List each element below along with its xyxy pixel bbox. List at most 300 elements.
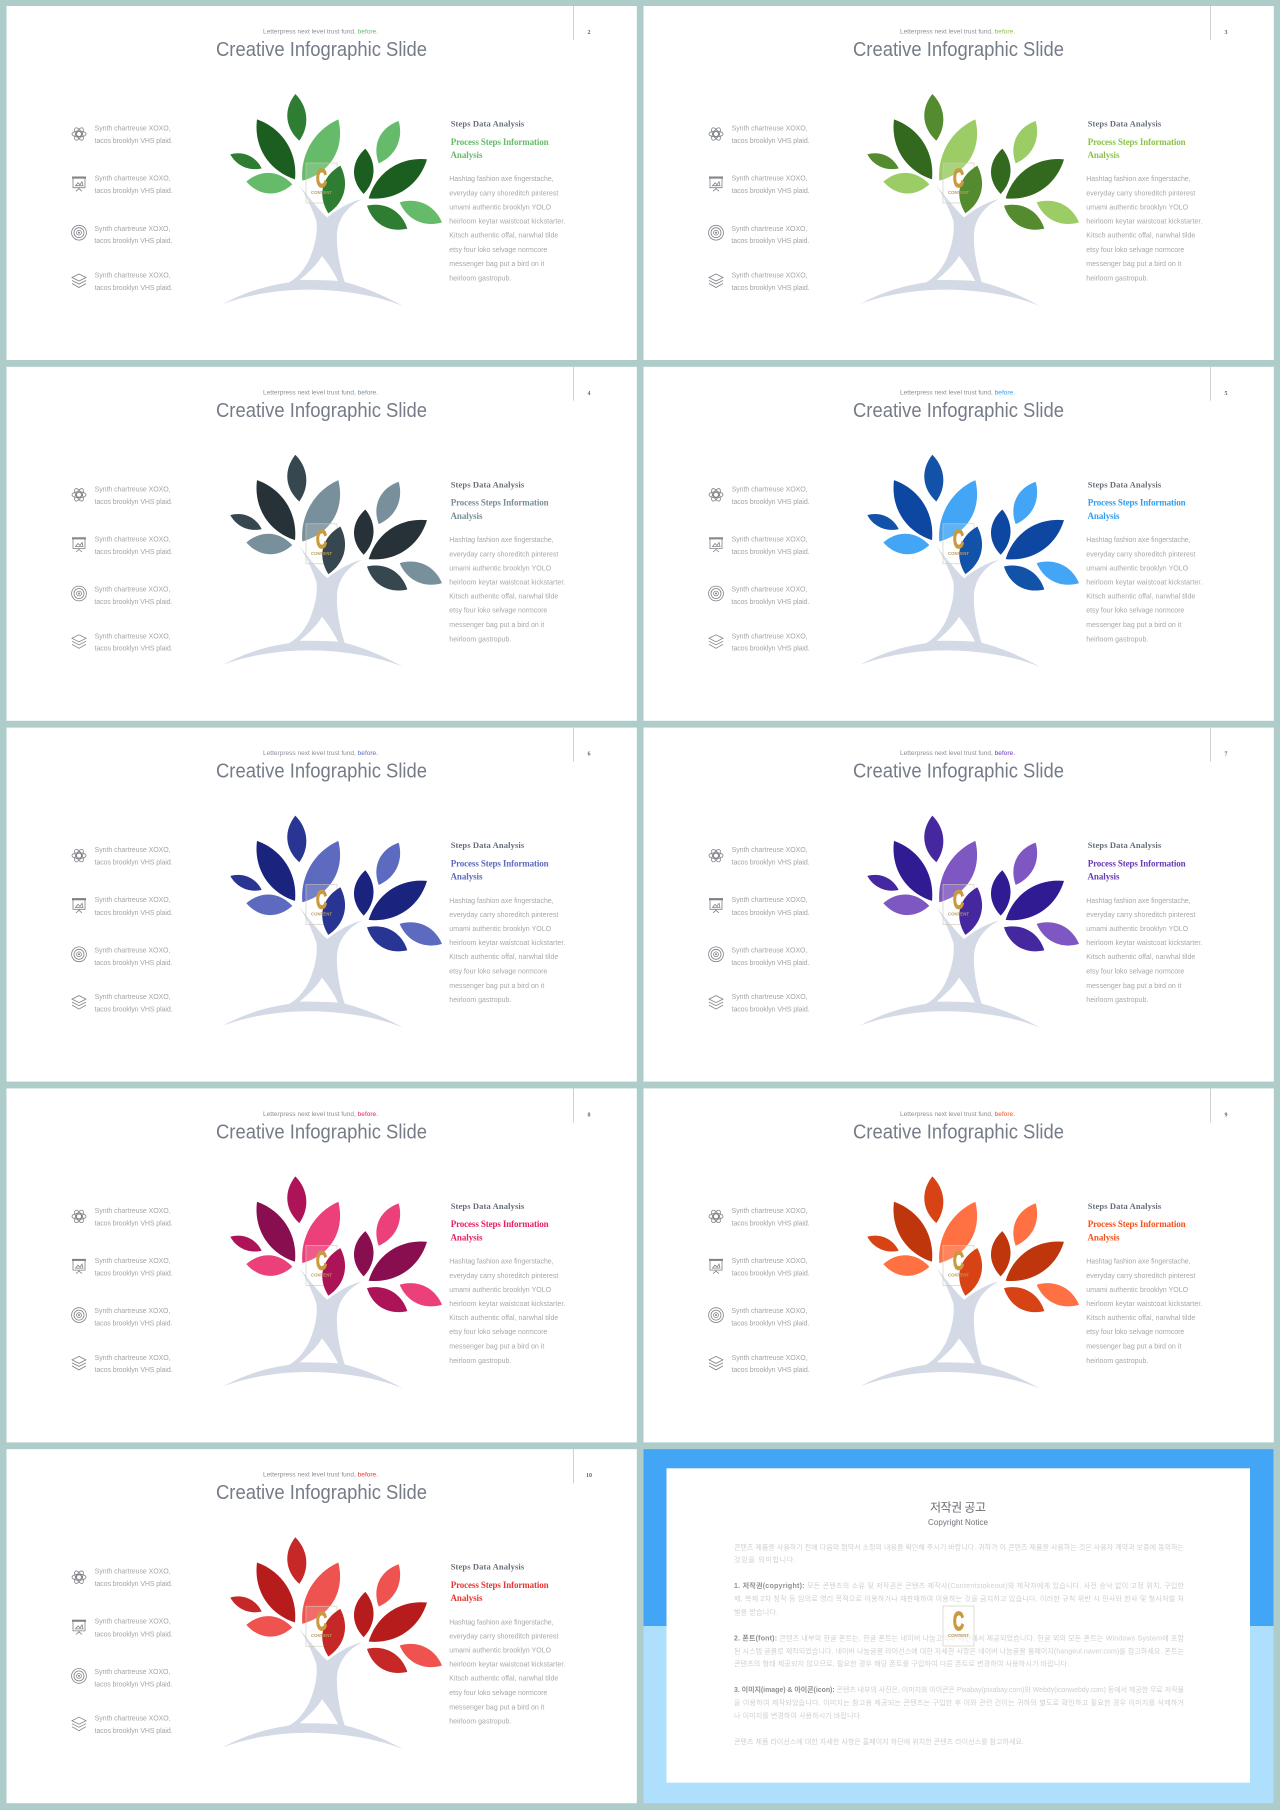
text block: messenger bag put a bird on it bbox=[449, 983, 544, 990]
text block: Hashtag fashion axe fingerstache, bbox=[1086, 176, 1191, 183]
copyright body text: 1. 저작권(copyright): 모든 콘텐츠의 소유 및 저작권은 콘텐츠 제작사(Contentstokeout)와 제작자에게 있습니다. 사전 승낙 없이 고정 위치, 구입한 bbox=[734, 1581, 1185, 1590]
copyright body text: 을 이용하여 제작되었습니다. 이미지는 참고용 제공되는 콘텐츠는 구입한 후 이와 관련 건이는 귀하의 별도로 확인하고 필요한 경우 이미지를 삭제하거 bbox=[734, 1698, 1184, 1707]
feature: layers icon and text: Synth chartreuse XOXO, bbox=[732, 272, 808, 280]
title: Creative Infographic Slide bbox=[216, 39, 427, 61]
text block: Analysis bbox=[1088, 872, 1120, 882]
subtitle: Letterpress next level trust fund, before. bbox=[263, 28, 378, 36]
text block: everyday carry shoreditch pinterest bbox=[449, 190, 558, 198]
feature: presentation icon and text bbox=[72, 1258, 173, 1278]
text block: everyday carry shoreditch pinterest bbox=[449, 1634, 558, 1641]
subtitle: Letterpress next level trust fund, before. bbox=[263, 1472, 378, 1479]
text block: etsy four loko selvage normcore bbox=[449, 247, 547, 254]
feature: layers icon and text: Synth chartreuse XOXO, bbox=[732, 994, 808, 1001]
copyright subheading: Copyright Notice bbox=[928, 1518, 989, 1527]
text block: Kitsch authentic offal, narwhal tilde bbox=[449, 232, 558, 240]
feature: layers icon and text: Synth chartreuse XOXO, bbox=[95, 1716, 171, 1723]
text block: heirloom gastropub. bbox=[1086, 276, 1148, 282]
text block bbox=[449, 479, 565, 643]
feature: target icon and text: tacos brooklyn VHS plaid. bbox=[94, 238, 172, 245]
text block: Kitsch authentic offal, narwhal tilde bbox=[449, 593, 558, 600]
feature: layers icon and text: tacos brooklyn VHS plaid. bbox=[732, 1006, 810, 1013]
text block: everyday carry shoreditch pinterest bbox=[449, 1273, 558, 1280]
text block: etsy four loko selvage normcore bbox=[449, 968, 547, 975]
text block bbox=[449, 118, 565, 282]
panel: copyright notice bbox=[644, 1449, 1274, 1803]
text block: messenger bag put a bird on it bbox=[449, 261, 544, 268]
feature: presentation icon and text: tacos brooklyn VHS plaid. bbox=[95, 1271, 173, 1278]
text block: Steps Data Analysis bbox=[451, 1201, 525, 1211]
text block: messenger bag put a bird on it bbox=[1086, 261, 1181, 268]
title: Creative Infographic Slide bbox=[853, 400, 1064, 422]
feature: presentation icon and text bbox=[709, 1258, 810, 1278]
text block: messenger bag put a bird on it bbox=[449, 622, 544, 629]
feature: target icon and text: Synth chartreuse XOXO, bbox=[731, 587, 807, 594]
text block: etsy four loko selvage normcore bbox=[449, 1329, 547, 1336]
panel: slide 7 purple tree bbox=[644, 728, 1274, 1082]
feature: layers icon and text: tacos brooklyn VHS plaid. bbox=[95, 646, 173, 653]
text block: etsy four loko selvage normcore bbox=[1086, 608, 1184, 615]
page number: 3 bbox=[1224, 30, 1228, 36]
feature: target icon and text: tacos brooklyn VHS plaid. bbox=[94, 599, 172, 606]
text block: everyday carry shoreditch pinterest bbox=[1086, 551, 1195, 558]
page number: 4 bbox=[588, 391, 590, 397]
tree illustration: CONTENT bbox=[311, 1272, 332, 1277]
text block: Steps Data Analysis bbox=[451, 840, 525, 850]
feature: target icon and text: tacos brooklyn VHS plaid. bbox=[731, 238, 809, 245]
tree illustration bbox=[860, 816, 1079, 1028]
feature: target icon and text: Synth chartreuse XOXO, bbox=[94, 1308, 170, 1315]
page number: 6 bbox=[588, 752, 590, 758]
panel: slide 2 green tree bbox=[6, 6, 637, 360]
text block: Steps Data Analysis bbox=[451, 479, 525, 489]
feature: presentation icon and text: tacos brooklyn VHS plaid. bbox=[732, 1271, 810, 1278]
text block: Steps Data Analysis bbox=[1088, 479, 1162, 489]
text block: Hashtag fashion axe fingerstache, bbox=[449, 537, 554, 544]
feature: target icon and text bbox=[709, 225, 809, 245]
feature: presentation icon and text bbox=[709, 536, 810, 556]
feature: presentation icon and text bbox=[709, 897, 810, 917]
tree illustration bbox=[223, 94, 442, 306]
text block: Analysis bbox=[450, 1593, 483, 1603]
feature: target icon and text: tacos brooklyn VHS plaid. bbox=[94, 960, 172, 967]
text block bbox=[1086, 1201, 1202, 1365]
feature list bbox=[709, 126, 810, 292]
feature: atom icon and text: Synth chartreuse XOXO, bbox=[95, 126, 171, 132]
feature: atom icon and text bbox=[72, 1208, 173, 1227]
feature: atom icon and text bbox=[709, 847, 810, 867]
feature: target icon and text bbox=[72, 1308, 172, 1328]
feature: target icon and text bbox=[709, 1308, 809, 1328]
text block bbox=[449, 840, 565, 1004]
feature: atom icon and text: tacos brooklyn VHS plaid. bbox=[732, 1220, 810, 1227]
feature: target icon and text bbox=[72, 947, 172, 967]
text block: heirloom gastropub. bbox=[449, 1358, 511, 1365]
text block: messenger bag put a bird on it bbox=[1086, 983, 1181, 990]
text block: umami authentic brooklyn YOLO bbox=[1086, 926, 1189, 933]
feature: atom icon and text bbox=[709, 1208, 810, 1227]
feature: layers icon and text: Synth chartreuse XOXO, bbox=[95, 1355, 171, 1362]
tree illustration: C bbox=[316, 1245, 327, 1275]
feature: layers icon and text: Synth chartreuse XOXO, bbox=[95, 272, 171, 280]
copyright body text: 콘텐츠 제품 라이선스에 대한 자세한 사항은 홈페이지 하단에 위치한 콘텐츠 라이선스를 참고하세요. bbox=[734, 1737, 1024, 1746]
feature: layers icon and text bbox=[72, 1716, 173, 1735]
text block: etsy four loko selvage normcore bbox=[1086, 968, 1184, 975]
feature: layers icon and text bbox=[709, 994, 810, 1013]
text block: heirloom keytar waistcoat kickstarter. bbox=[449, 940, 565, 947]
text block: heirloom keytar waistcoat kickstarter. bbox=[449, 1301, 565, 1308]
feature: atom icon and text: tacos brooklyn VHS plaid. bbox=[95, 1581, 173, 1588]
feature: layers icon and text bbox=[709, 272, 810, 292]
text block: Steps Data Analysis bbox=[451, 1562, 525, 1572]
feature: layers icon and text: tacos brooklyn VHS plaid. bbox=[732, 285, 810, 292]
text block: Analysis bbox=[450, 1232, 483, 1242]
copyright body text: 된 시스템 글꼴로 제작되었습니다. 네이버 나눔글꼴 라이선스에 대한 자세한 사항은 네이버 나눔글꼴 홈페이지(hangeul.naver.com)를 참고하세요. 폰트는 bbox=[734, 1646, 1185, 1656]
text block: heirloom gastropub. bbox=[449, 1719, 511, 1726]
tree illustration bbox=[223, 1537, 442, 1749]
feature: presentation icon and text bbox=[72, 176, 173, 195]
tree illustration: C bbox=[316, 524, 327, 554]
watermark logo: C bbox=[953, 1606, 964, 1636]
text block: etsy four loko selvage normcore bbox=[449, 1690, 547, 1697]
tree illustration bbox=[860, 1176, 1079, 1388]
text block bbox=[1086, 479, 1202, 643]
tree illustration bbox=[860, 94, 1079, 306]
title: Creative Infographic Slide bbox=[216, 761, 427, 783]
feature: presentation icon and text: Synth chartreuse XOXO, bbox=[95, 536, 171, 543]
feature: layers icon and text: Synth chartreuse XOXO, bbox=[95, 994, 171, 1001]
page number: 10 bbox=[586, 1473, 592, 1479]
feature: atom icon and text bbox=[709, 126, 810, 145]
text block: heirloom gastropub. bbox=[1086, 636, 1148, 643]
text block bbox=[449, 1562, 565, 1726]
watermark logo bbox=[943, 1606, 974, 1646]
panel: slide 6 indigo tree bbox=[6, 728, 637, 1082]
feature: atom icon and text bbox=[72, 1569, 173, 1588]
feature: atom icon and text: Synth chartreuse XOXO, bbox=[95, 1569, 171, 1576]
feature: layers icon and text bbox=[72, 633, 173, 653]
feature: presentation icon and text bbox=[72, 536, 173, 556]
feature: layers icon and text bbox=[72, 1355, 173, 1374]
subtitle: Letterpress next level trust fund, before. bbox=[900, 750, 1015, 757]
copyright body text: 3. 이미지(image) & 아이콘(icon): 콘텐츠 내부의 사진은, 이미지와 아이콘은 Pixabay(pixabay.com)와 Webdy(iconwebdy.com) 등에서 제공한 무료 저작물 bbox=[734, 1685, 1185, 1694]
feature: presentation icon and text: tacos brooklyn VHS plaid. bbox=[95, 549, 173, 556]
text block: Kitsch authentic offal, narwhal tilde bbox=[449, 1676, 558, 1683]
feature: layers icon and text: tacos brooklyn VHS plaid. bbox=[732, 646, 810, 653]
feature: atom icon and text: tacos brooklyn VHS plaid. bbox=[732, 860, 810, 867]
feature: presentation icon and text: Synth chartreuse XOXO, bbox=[732, 1258, 808, 1265]
panel: slide 4 slate tree bbox=[6, 367, 637, 721]
feature: atom icon and text: Synth chartreuse XOXO, bbox=[95, 847, 171, 854]
feature: layers icon and text: tacos brooklyn VHS plaid. bbox=[95, 1006, 173, 1013]
text block: Steps Data Analysis bbox=[1088, 1201, 1162, 1211]
feature: target icon and text bbox=[709, 947, 809, 967]
copyright body text: 나 이미지를 변경하여 사용하시기 바랍니다. bbox=[734, 1711, 862, 1720]
title: Creative Infographic Slide bbox=[853, 39, 1064, 61]
feature: atom icon and text: tacos brooklyn VHS plaid. bbox=[95, 1220, 173, 1227]
text block: Process Steps Information bbox=[451, 498, 549, 508]
text block: heirloom keytar waistcoat kickstarter. bbox=[449, 218, 565, 226]
feature: layers icon and text: tacos brooklyn VHS plaid. bbox=[95, 285, 173, 292]
feature: presentation icon and text: Synth chartreuse XOXO, bbox=[732, 536, 808, 543]
text block: Kitsch authentic offal, narwhal tilde bbox=[1086, 954, 1195, 961]
text block: Process Steps Information bbox=[1088, 1219, 1186, 1229]
copyright body text bbox=[734, 1542, 1185, 1746]
tree illustration: C bbox=[953, 524, 964, 554]
title: Creative Infographic Slide bbox=[216, 1482, 427, 1504]
title: Creative Infographic Slide bbox=[216, 1121, 427, 1143]
feature: presentation icon and text: Synth chartreuse XOXO, bbox=[95, 1619, 171, 1626]
text block: Analysis bbox=[1088, 1232, 1120, 1242]
panel: slide 9 orange tree bbox=[644, 1088, 1274, 1442]
text block: umami authentic brooklyn YOLO bbox=[449, 1287, 552, 1294]
feature: atom icon and text bbox=[72, 486, 173, 506]
page number: 9 bbox=[1224, 1112, 1228, 1118]
text block: everyday carry shoreditch pinterest bbox=[1086, 1273, 1195, 1280]
feature: atom icon and text bbox=[709, 486, 810, 506]
feature: atom icon and text: tacos brooklyn VHS plaid. bbox=[95, 138, 173, 145]
copyright body text: 콘텐츠 제품을 사용하기 전에 다음의 협약서 소정의 내용을 확인해 주시기 바랍니다. 귀하가 이 콘텐츠 제품을 사용하는 것은 사용자 계약과 보증에 동의하는 bbox=[734, 1542, 1185, 1552]
text block: etsy four loko selvage normcore bbox=[1086, 247, 1184, 254]
text block: heirloom gastropub. bbox=[449, 997, 511, 1004]
text block: Process Steps Information bbox=[451, 1219, 549, 1229]
feature: atom icon and text: Synth chartreuse XOXO, bbox=[95, 1208, 171, 1215]
text block: Hashtag fashion axe fingerstache, bbox=[1086, 898, 1191, 905]
text block bbox=[449, 1201, 565, 1365]
feature list bbox=[72, 1208, 173, 1374]
feature: target icon and text bbox=[72, 586, 172, 606]
feature: layers icon and text bbox=[72, 272, 173, 292]
feature: target icon and text: Synth chartreuse XOXO, bbox=[731, 1308, 807, 1315]
text block: Steps Data Analysis bbox=[1088, 118, 1162, 128]
copyright body text: 벌을 받습니다. bbox=[734, 1608, 778, 1616]
subtitle: Letterpress next level trust fund, before. bbox=[900, 389, 1015, 396]
text block: Analysis bbox=[450, 150, 483, 160]
text block: umami authentic brooklyn YOLO bbox=[449, 204, 552, 212]
feature: atom icon and text bbox=[72, 126, 173, 145]
text block: Analysis bbox=[450, 511, 483, 521]
feature list bbox=[72, 486, 173, 653]
subtitle: Letterpress next level trust fund, before. bbox=[263, 750, 378, 757]
feature: atom icon and text: Synth chartreuse XOXO, bbox=[95, 486, 171, 493]
text block: everyday carry shoreditch pinterest bbox=[1086, 912, 1195, 919]
text block: Process Steps Information bbox=[451, 858, 549, 868]
text block: etsy four loko selvage normcore bbox=[449, 608, 547, 615]
tree illustration: CONTENT bbox=[948, 190, 969, 195]
tree illustration: C bbox=[953, 1245, 964, 1275]
text block: Hashtag fashion axe fingerstache, bbox=[449, 1619, 554, 1626]
feature: presentation icon and text: Synth chartreuse XOXO, bbox=[95, 897, 171, 904]
watermark logo: CONTENT bbox=[948, 1633, 969, 1638]
text block: umami authentic brooklyn YOLO bbox=[449, 1648, 552, 1655]
text block: heirloom keytar waistcoat kickstarter. bbox=[449, 1662, 565, 1669]
panel: slide 8 pink tree bbox=[6, 1088, 637, 1442]
text block: Process Steps Information bbox=[451, 1580, 549, 1590]
text block: everyday carry shoreditch pinterest bbox=[1086, 190, 1195, 198]
feature: presentation icon and text bbox=[72, 1619, 173, 1638]
feature: layers icon and text bbox=[709, 1355, 810, 1374]
title: Creative Infographic Slide bbox=[853, 1121, 1064, 1143]
feature: target icon and text bbox=[72, 225, 172, 245]
feature: atom icon and text: tacos brooklyn VHS plaid. bbox=[95, 499, 173, 506]
feature: target icon and text: Synth chartreuse XOXO, bbox=[94, 947, 170, 954]
feature: presentation icon and text: tacos brooklyn VHS plaid. bbox=[732, 910, 810, 917]
text block: umami authentic brooklyn YOLO bbox=[1086, 204, 1189, 212]
panel: slide 10 red tree bbox=[6, 1449, 637, 1803]
page number: 8 bbox=[588, 1112, 590, 1118]
text block: Process Steps Information bbox=[451, 137, 549, 147]
text block: messenger bag put a bird on it bbox=[449, 1704, 544, 1711]
tree illustration bbox=[223, 455, 442, 667]
text block: Hashtag fashion axe fingerstache, bbox=[1086, 537, 1191, 544]
copyright body text: 것임을 의미합니다. bbox=[734, 1555, 796, 1564]
text block: umami authentic brooklyn YOLO bbox=[1086, 1287, 1189, 1294]
text block: Hashtag fashion axe fingerstache, bbox=[449, 898, 554, 905]
copyright body text: 제, 복제 2차 창작 등 임의로 영리 목적으로 이용하거나 재판매하여 이용하는 것을 금지하고 있습니다. 이러한 규칙 위반 시 민사와 한사 및 형사처벌 처 bbox=[734, 1594, 1184, 1603]
tree illustration: C bbox=[316, 1606, 327, 1636]
feature: target icon and text: tacos brooklyn VHS plaid. bbox=[731, 1321, 809, 1328]
text block: Kitsch authentic offal, narwhal tilde bbox=[449, 954, 558, 961]
subtitle: Letterpress next level trust fund, before. bbox=[900, 1111, 1015, 1118]
feature: presentation icon and text bbox=[709, 176, 810, 195]
feature: presentation icon and text: Synth chartreuse XOXO, bbox=[95, 1258, 171, 1265]
feature: layers icon and text: tacos brooklyn VHS plaid. bbox=[95, 1367, 173, 1374]
text block: umami authentic brooklyn YOLO bbox=[449, 565, 552, 572]
text block: Analysis bbox=[1088, 511, 1120, 521]
feature: presentation icon and text: tacos brooklyn VHS plaid. bbox=[732, 188, 810, 195]
text block: Kitsch authentic offal, narwhal tilde bbox=[1086, 593, 1195, 600]
feature: target icon and text bbox=[72, 1668, 172, 1688]
feature: target icon and text: tacos brooklyn VHS plaid. bbox=[94, 1321, 172, 1328]
text block: Hashtag fashion axe fingerstache, bbox=[449, 176, 554, 183]
tree illustration bbox=[860, 455, 1079, 667]
feature list bbox=[709, 486, 810, 653]
text block: heirloom gastropub. bbox=[449, 636, 511, 643]
text block: heirloom keytar waistcoat kickstarter. bbox=[1086, 1301, 1202, 1308]
tree illustration bbox=[223, 816, 442, 1028]
text block: heirloom gastropub. bbox=[449, 276, 511, 282]
text block: Kitsch authentic offal, narwhal tilde bbox=[1086, 1315, 1195, 1322]
feature: atom icon and text: Synth chartreuse XOXO, bbox=[732, 847, 808, 854]
text block: Steps Data Analysis bbox=[451, 118, 525, 128]
tree illustration: CONTENT bbox=[948, 1272, 969, 1277]
feature: target icon and text: Synth chartreuse XOXO, bbox=[731, 226, 807, 233]
feature: atom icon and text: Synth chartreuse XOXO, bbox=[732, 486, 808, 493]
text block: Process Steps Information bbox=[1088, 137, 1186, 147]
text block: messenger bag put a bird on it bbox=[449, 1344, 544, 1351]
feature: target icon and text: tacos brooklyn VHS plaid. bbox=[731, 960, 809, 967]
tree illustration: CONTENT bbox=[948, 912, 969, 917]
text block: Process Steps Information bbox=[1088, 858, 1186, 868]
text block: Steps Data Analysis bbox=[1088, 840, 1162, 850]
page number: 5 bbox=[1224, 391, 1228, 397]
feature: layers icon and text: tacos brooklyn VHS plaid. bbox=[95, 1728, 173, 1735]
text block: Process Steps Information bbox=[1088, 498, 1186, 508]
tree illustration: CONTENT bbox=[311, 190, 332, 195]
text block: heirloom keytar waistcoat kickstarter. bbox=[1086, 218, 1202, 226]
panel: slide 5 blue tree bbox=[644, 367, 1274, 721]
text block: umami authentic brooklyn YOLO bbox=[1086, 565, 1189, 572]
text block: Hashtag fashion axe fingerstache, bbox=[449, 1259, 554, 1266]
feature: layers icon and text: Synth chartreuse XOXO, bbox=[732, 1355, 808, 1362]
text block: heirloom gastropub. bbox=[1086, 997, 1148, 1004]
feature: layers icon and text: Synth chartreuse XOXO, bbox=[95, 633, 171, 640]
feature: presentation icon and text: tacos brooklyn VHS plaid. bbox=[732, 549, 810, 556]
feature: layers icon and text: tacos brooklyn VHS plaid. bbox=[732, 1367, 810, 1374]
tree illustration: C bbox=[953, 885, 964, 915]
feature: presentation icon and text: Synth chartreuse XOXO, bbox=[732, 897, 808, 904]
feature: target icon and text: Synth chartreuse XOXO, bbox=[94, 587, 170, 594]
title: Creative Infographic Slide bbox=[216, 400, 427, 422]
tree illustration: C bbox=[953, 163, 964, 193]
text block: Hashtag fashion axe fingerstache, bbox=[1086, 1259, 1191, 1266]
feature: target icon and text: Synth chartreuse XOXO, bbox=[94, 226, 170, 233]
copyright body text: 콘텐츠의 형태 제공되지 않으므로, 필요한 경우 해당 폰트를 구입하여 다른 폰트로 변경하여 사용하시기 바랍니다. bbox=[734, 1659, 1069, 1668]
feature: target icon and text: Synth chartreuse XOXO, bbox=[94, 1669, 170, 1676]
page number: 7 bbox=[1224, 752, 1228, 758]
tree illustration: CONTENT bbox=[311, 1633, 332, 1638]
text block: Kitsch authentic offal, narwhal tilde bbox=[1086, 232, 1195, 240]
page number: 2 bbox=[588, 30, 590, 36]
feature: target icon and text bbox=[709, 586, 809, 606]
text block: Analysis bbox=[450, 872, 483, 882]
copyright body text: 2. 폰트(font): 콘텐츠 내부의 한글 폰트는, 한글 폰트는 네이버 나눔고딕과 체언에서 제공되었습니다. 한글 외의 모든 폰트는 Windows System에 포함 bbox=[734, 1634, 1185, 1642]
feature: atom icon and text: Synth chartreuse XOXO, bbox=[732, 1208, 808, 1215]
feature list bbox=[72, 1569, 173, 1735]
feature: atom icon and text: tacos brooklyn VHS plaid. bbox=[95, 860, 173, 867]
feature: layers icon and text: Synth chartreuse XOXO, bbox=[732, 633, 808, 640]
feature: layers icon and text bbox=[709, 633, 810, 653]
text block: heirloom keytar waistcoat kickstarter. bbox=[449, 579, 565, 586]
feature: presentation icon and text bbox=[72, 897, 173, 917]
text block bbox=[1086, 840, 1202, 1004]
feature: presentation icon and text: Synth chartreuse XOXO, bbox=[95, 176, 171, 182]
feature: presentation icon and text: tacos brooklyn VHS plaid. bbox=[95, 910, 173, 917]
feature: layers icon and text bbox=[72, 994, 173, 1013]
feature: atom icon and text: Synth chartreuse XOXO, bbox=[732, 126, 808, 132]
copyright heading: 저작권 공고 bbox=[930, 1500, 986, 1514]
text block: heirloom keytar waistcoat kickstarter. bbox=[1086, 579, 1202, 586]
feature list bbox=[709, 1208, 810, 1374]
tree illustration: C bbox=[316, 163, 327, 193]
tree illustration: CONTENT bbox=[311, 551, 332, 556]
title: Creative Infographic Slide bbox=[853, 761, 1064, 783]
tree illustration: C bbox=[316, 885, 327, 915]
text block: messenger bag put a bird on it bbox=[1086, 1344, 1181, 1351]
feature: presentation icon and text: tacos brooklyn VHS plaid. bbox=[95, 188, 173, 195]
text block bbox=[1086, 118, 1202, 282]
subtitle: Letterpress next level trust fund, before. bbox=[263, 1111, 378, 1118]
text block: heirloom gastropub. bbox=[1086, 1358, 1148, 1365]
feature: presentation icon and text: Synth chartreuse XOXO, bbox=[732, 176, 808, 182]
tree illustration: CONTENT bbox=[948, 551, 969, 556]
feature: target icon and text: tacos brooklyn VHS plaid. bbox=[94, 1681, 172, 1688]
subtitle: Letterpress next level trust fund, before. bbox=[900, 28, 1015, 36]
text block: everyday carry shoreditch pinterest bbox=[449, 551, 558, 558]
feature: target icon and text: Synth chartreuse XOXO, bbox=[731, 947, 807, 954]
feature list bbox=[72, 126, 173, 292]
text block: everyday carry shoreditch pinterest bbox=[449, 912, 558, 919]
text block: Analysis bbox=[1088, 150, 1120, 160]
subtitle: Letterpress next level trust fund, before. bbox=[263, 389, 378, 396]
text block: messenger bag put a bird on it bbox=[1086, 622, 1181, 629]
panel: slide 3 lime tree bbox=[644, 6, 1274, 360]
feature list bbox=[72, 847, 173, 1013]
text block: Kitsch authentic offal, narwhal tilde bbox=[449, 1315, 558, 1322]
feature: atom icon and text bbox=[72, 847, 173, 867]
text block: etsy four loko selvage normcore bbox=[1086, 1329, 1184, 1336]
feature: presentation icon and text: tacos brooklyn VHS plaid. bbox=[95, 1631, 173, 1638]
tree illustration bbox=[223, 1176, 442, 1388]
